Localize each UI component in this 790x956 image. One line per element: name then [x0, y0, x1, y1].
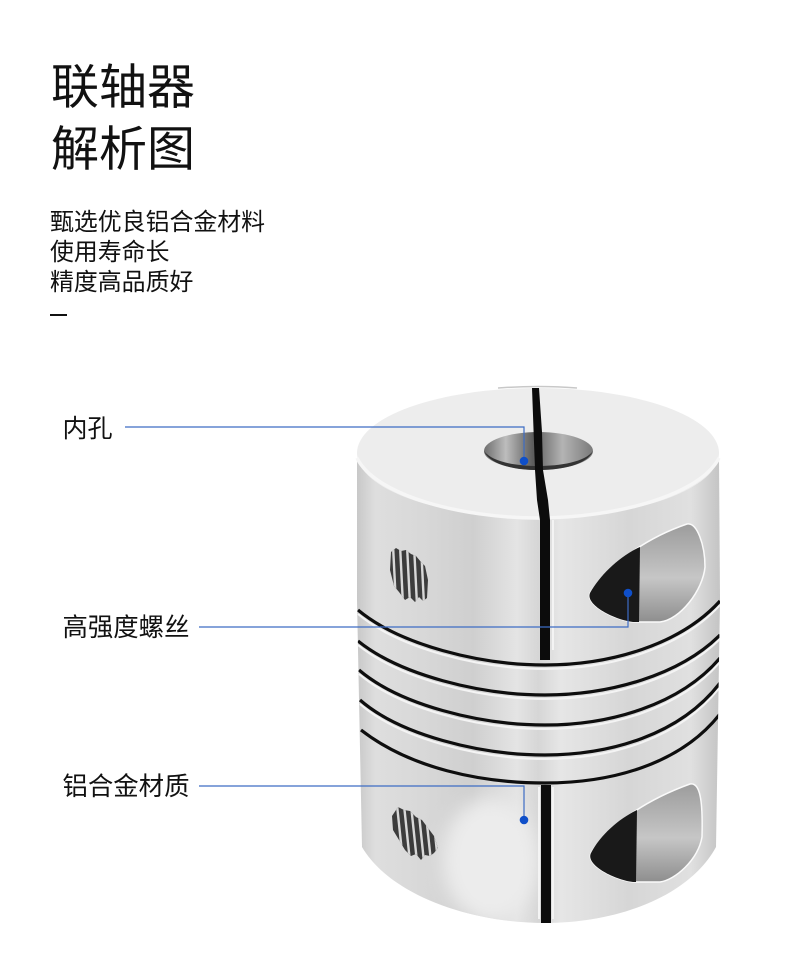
callout: 内孔 [62, 415, 528, 465]
title [51, 62, 195, 176]
upper right window [589, 524, 705, 622]
coupling illustration [357, 386, 720, 923]
title: 联轴器 [51, 62, 195, 114]
short dash divider [50, 314, 67, 316]
cylinder body [357, 458, 720, 923]
description text [50, 209, 265, 296]
lower body pale patch [442, 798, 538, 922]
callout: 高强度螺丝: 高强度螺丝 [62, 614, 189, 642]
description text: 使用寿命长 [50, 239, 170, 266]
callout: 铝合金材质 [62, 773, 528, 824]
description text: 甄选优良铝合金材料 [50, 209, 265, 236]
back rim of top face [498, 386, 577, 388]
top slit [532, 388, 550, 660]
callout: 铝合金材质: 铝合金材质 [62, 773, 189, 801]
description text: 精度高品质好 [50, 269, 193, 296]
flexure grooves [358, 601, 720, 783]
top face rim [357, 458, 719, 518]
bore hole inner shadow [484, 451, 593, 470]
lower left threaded hole [392, 807, 438, 860]
light edges below grooves [358, 605, 720, 759]
top face [357, 388, 719, 518]
title: 解析图 [51, 124, 195, 176]
lower slit [541, 785, 551, 923]
lower right window [590, 784, 702, 882]
upper left threaded hole [390, 548, 428, 602]
bore hole [484, 432, 593, 470]
slit highlights [538, 520, 554, 919]
callout: 高强度螺丝 [62, 589, 632, 642]
callout: 内孔: 内孔 [62, 415, 113, 443]
